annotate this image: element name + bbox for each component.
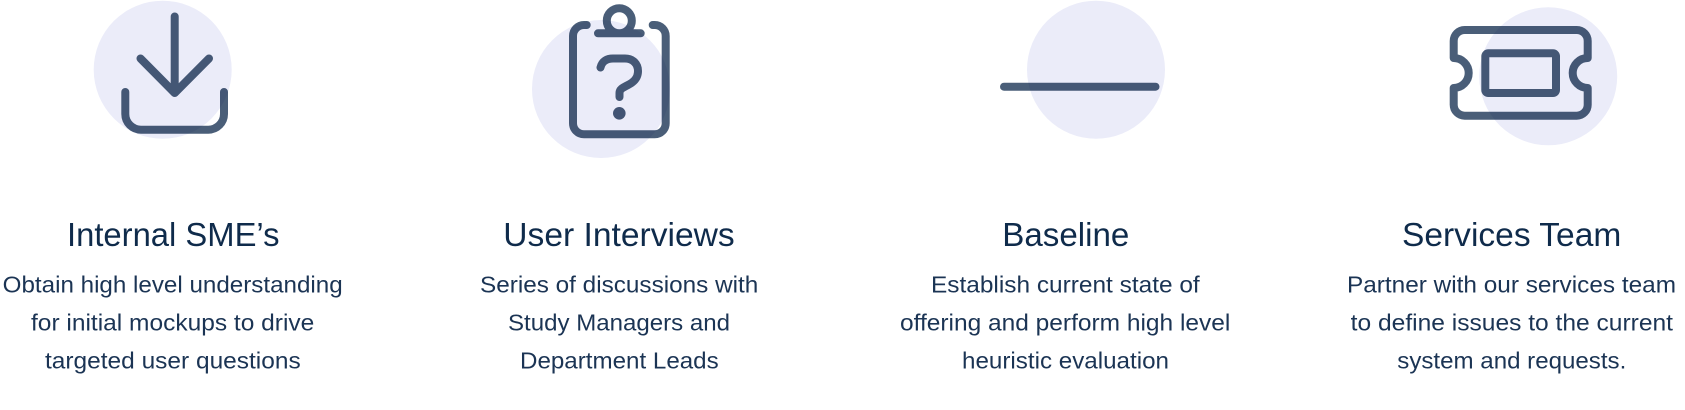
heading: Baseline: Baseline <box>1002 216 1129 253</box>
text block: Baseline description <box>900 271 1230 373</box>
text block: Internal SME's description <box>3 271 343 373</box>
text block: Services Team description: Partner with our services team <box>1347 271 1676 297</box>
icon: download <box>94 1 232 139</box>
panel: Services Team <box>1347 7 1676 373</box>
icon: ticket <box>1454 7 1617 145</box>
icon: clipboard with question mark <box>532 8 670 158</box>
heading: User Interviews: User Interviews <box>503 216 735 253</box>
text block: Internal SME's description: for initial mockups to drive <box>31 309 314 335</box>
text block: User Interviews description: Study Managers and <box>508 309 730 335</box>
text block: User Interviews description: Series of discussions with <box>480 271 758 297</box>
text block: Baseline description: Establish current state of <box>931 271 1200 297</box>
text block: Services Team description <box>1347 271 1676 373</box>
icon: baseline bar <box>1004 1 1165 139</box>
text block: User Interviews description <box>480 271 758 373</box>
text block: Baseline description: heuristic evaluation <box>962 347 1169 373</box>
panel: Baseline <box>900 1 1230 373</box>
text block: Services Team description: system and requests. <box>1397 347 1626 373</box>
text block: Baseline description: offering and perform high level <box>900 309 1230 335</box>
heading: Services Team: Services Team <box>1402 216 1621 253</box>
panel: User Interviews <box>480 8 758 373</box>
text block: User Interviews description: Department Leads <box>520 347 719 373</box>
heading: Internal SME's: Internal SME’s <box>67 216 280 253</box>
text block: Services Team description: to define issues to the current <box>1351 309 1674 335</box>
text block: Internal SME's description: targeted user questions <box>45 347 301 373</box>
text block: Internal SME's description: Obtain high level understanding <box>3 271 343 297</box>
panel: Internal SME's <box>3 1 343 373</box>
